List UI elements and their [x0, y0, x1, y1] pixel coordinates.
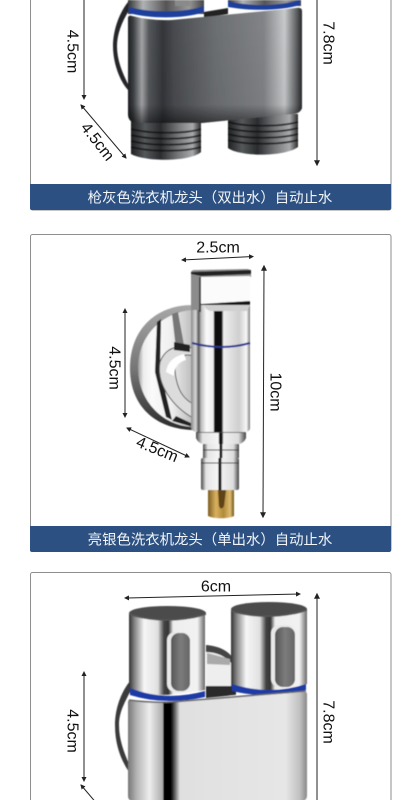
dimension: total height: 10cm — [266, 372, 284, 412]
dimension: plate depth: 4.5cm — [134, 434, 180, 466]
panel frame — [30, 572, 391, 800]
caption banner: 枪灰色洗衣机龙头（双出水）自动止水 — [88, 190, 333, 206]
caption banner — [30, 526, 391, 552]
panel frame — [30, 234, 391, 552]
dimension: width: 6cm — [201, 578, 231, 596]
dimension: wall plate depth: 4.5cm — [77, 120, 117, 164]
dimension: plate height: 4.5cm — [106, 346, 122, 390]
panel: gunmetal double-outlet faucet — [30, 0, 391, 210]
dimension: plate depth — [127, 428, 189, 466]
dimension: plate height — [106, 309, 125, 417]
dimension: width — [125, 578, 300, 598]
panel frame — [30, 0, 391, 210]
dimension: wall plate height: 4.5cm — [64, 30, 80, 73]
dimension: height: 7.8cm — [320, 700, 336, 744]
icon: gunmetal faucet — [113, 0, 302, 160]
caption banner: 亮银色洗衣机龙头（单出水）自动止水 — [88, 532, 333, 548]
panel: bright silver single-outlet faucet — [30, 234, 391, 552]
dimension: plate height: 4.5cm — [64, 709, 80, 753]
icon: silver faucet — [130, 269, 251, 518]
icon: chrome faucet — [115, 602, 307, 800]
panel: chrome double-outlet faucet — [30, 572, 391, 800]
dimension: top width: 2.5cm — [196, 240, 240, 256]
dimension: top width — [182, 240, 253, 260]
dimension: wall plate height — [64, 0, 84, 99]
dimension: plate height — [64, 672, 84, 781]
caption banner — [30, 184, 391, 210]
dimension: plate depth arrow — [81, 785, 98, 800]
dimension: height: 7.8cm — [320, 21, 336, 65]
dimension: wall plate depth — [77, 105, 126, 164]
